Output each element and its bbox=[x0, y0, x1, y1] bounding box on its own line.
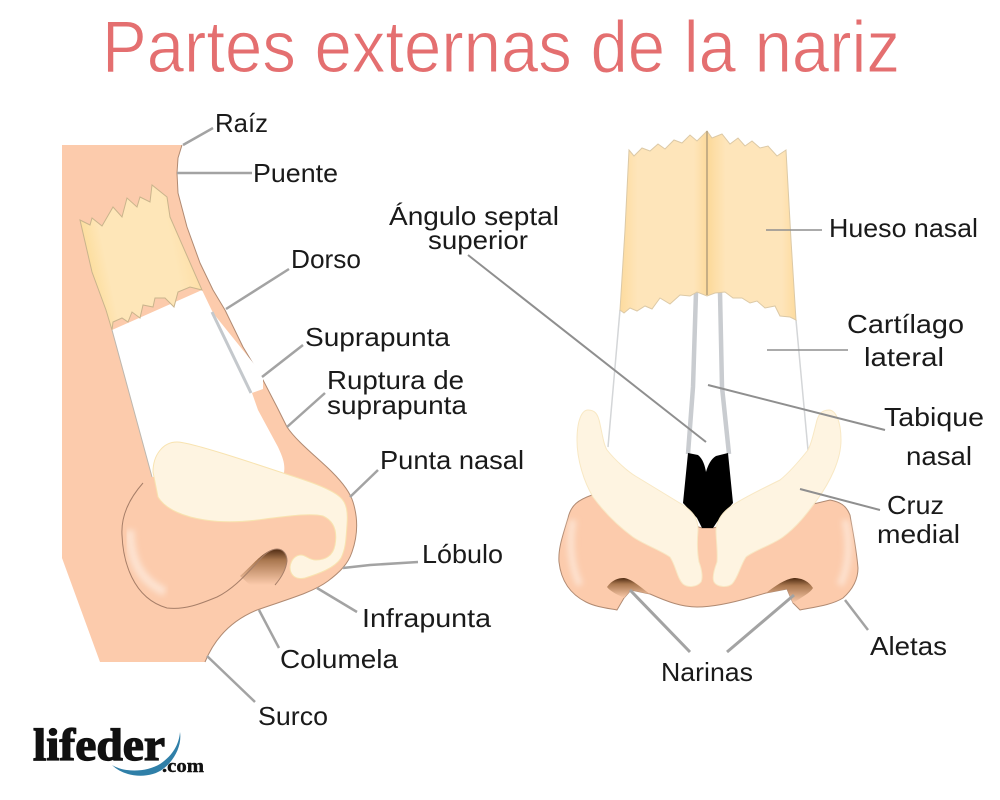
nostrils bbox=[607, 578, 650, 598]
label: Ruptura de suprapunta, second line: suprapunta bbox=[327, 390, 468, 420]
labels bbox=[215, 108, 984, 731]
label: Ángulo septal superior: Ángulo septal bbox=[389, 201, 559, 231]
label: Cartílago lateral: Cartílago bbox=[847, 309, 964, 339]
black cavity bbox=[683, 453, 733, 528]
label: Tabique nasal, second line: nasal bbox=[906, 441, 972, 471]
logo: lifeder.com: lifeder bbox=[33, 719, 165, 770]
label: Lóbulo: Lóbulo bbox=[422, 539, 503, 569]
label: Aletas: Aletas bbox=[870, 631, 947, 661]
skin profile bbox=[62, 145, 357, 662]
nostril bbox=[240, 549, 287, 585]
ala highlight bbox=[130, 530, 165, 592]
highlights bbox=[571, 520, 848, 585]
right medial crus bbox=[713, 410, 841, 586]
label: Ángulo septal superior, second line: superior bbox=[428, 225, 528, 255]
label: Narinas: Narinas bbox=[661, 657, 753, 687]
label: Cruz medial, second line: medial bbox=[877, 519, 960, 549]
logo: lifeder.com bbox=[33, 719, 204, 777]
skin bbox=[559, 495, 858, 610]
side view of the nose bbox=[62, 145, 357, 662]
label: Puente: Puente bbox=[253, 158, 338, 188]
septal sliver line bbox=[212, 312, 251, 393]
alar cartilage bbox=[153, 442, 347, 578]
label: Suprapunta: Suprapunta bbox=[305, 322, 451, 352]
label: Cruz medial: Cruz bbox=[887, 490, 944, 520]
label: Ruptura de suprapunta: Ruptura de bbox=[327, 365, 464, 395]
logo: lifeder.com: .com bbox=[162, 756, 204, 777]
label: Raíz: Raíz bbox=[215, 108, 268, 138]
ala outline bbox=[122, 483, 287, 608]
left medial crus bbox=[577, 410, 702, 586]
leader lines bbox=[177, 128, 885, 702]
lateral cartilage bbox=[112, 290, 284, 477]
title: Partes externas de la nariz bbox=[102, 7, 900, 88]
nasal bone bbox=[80, 185, 202, 330]
label: Punta nasal: Punta nasal bbox=[380, 445, 524, 475]
label: Cartílago lateral, second line: lateral bbox=[864, 342, 944, 372]
label: Dorso: Dorso bbox=[291, 244, 361, 274]
front view of the nose bbox=[559, 131, 858, 610]
label: Hueso nasal: Hueso nasal bbox=[829, 213, 978, 243]
lateral cartilage and septum bbox=[608, 295, 808, 505]
label: Surco: Surco bbox=[258, 701, 328, 731]
label: Columela: Columela bbox=[280, 644, 399, 674]
label: Infrapunta: Infrapunta bbox=[362, 603, 492, 633]
label: Tabique nasal: Tabique bbox=[884, 402, 984, 432]
nasal bone bbox=[620, 131, 796, 320]
